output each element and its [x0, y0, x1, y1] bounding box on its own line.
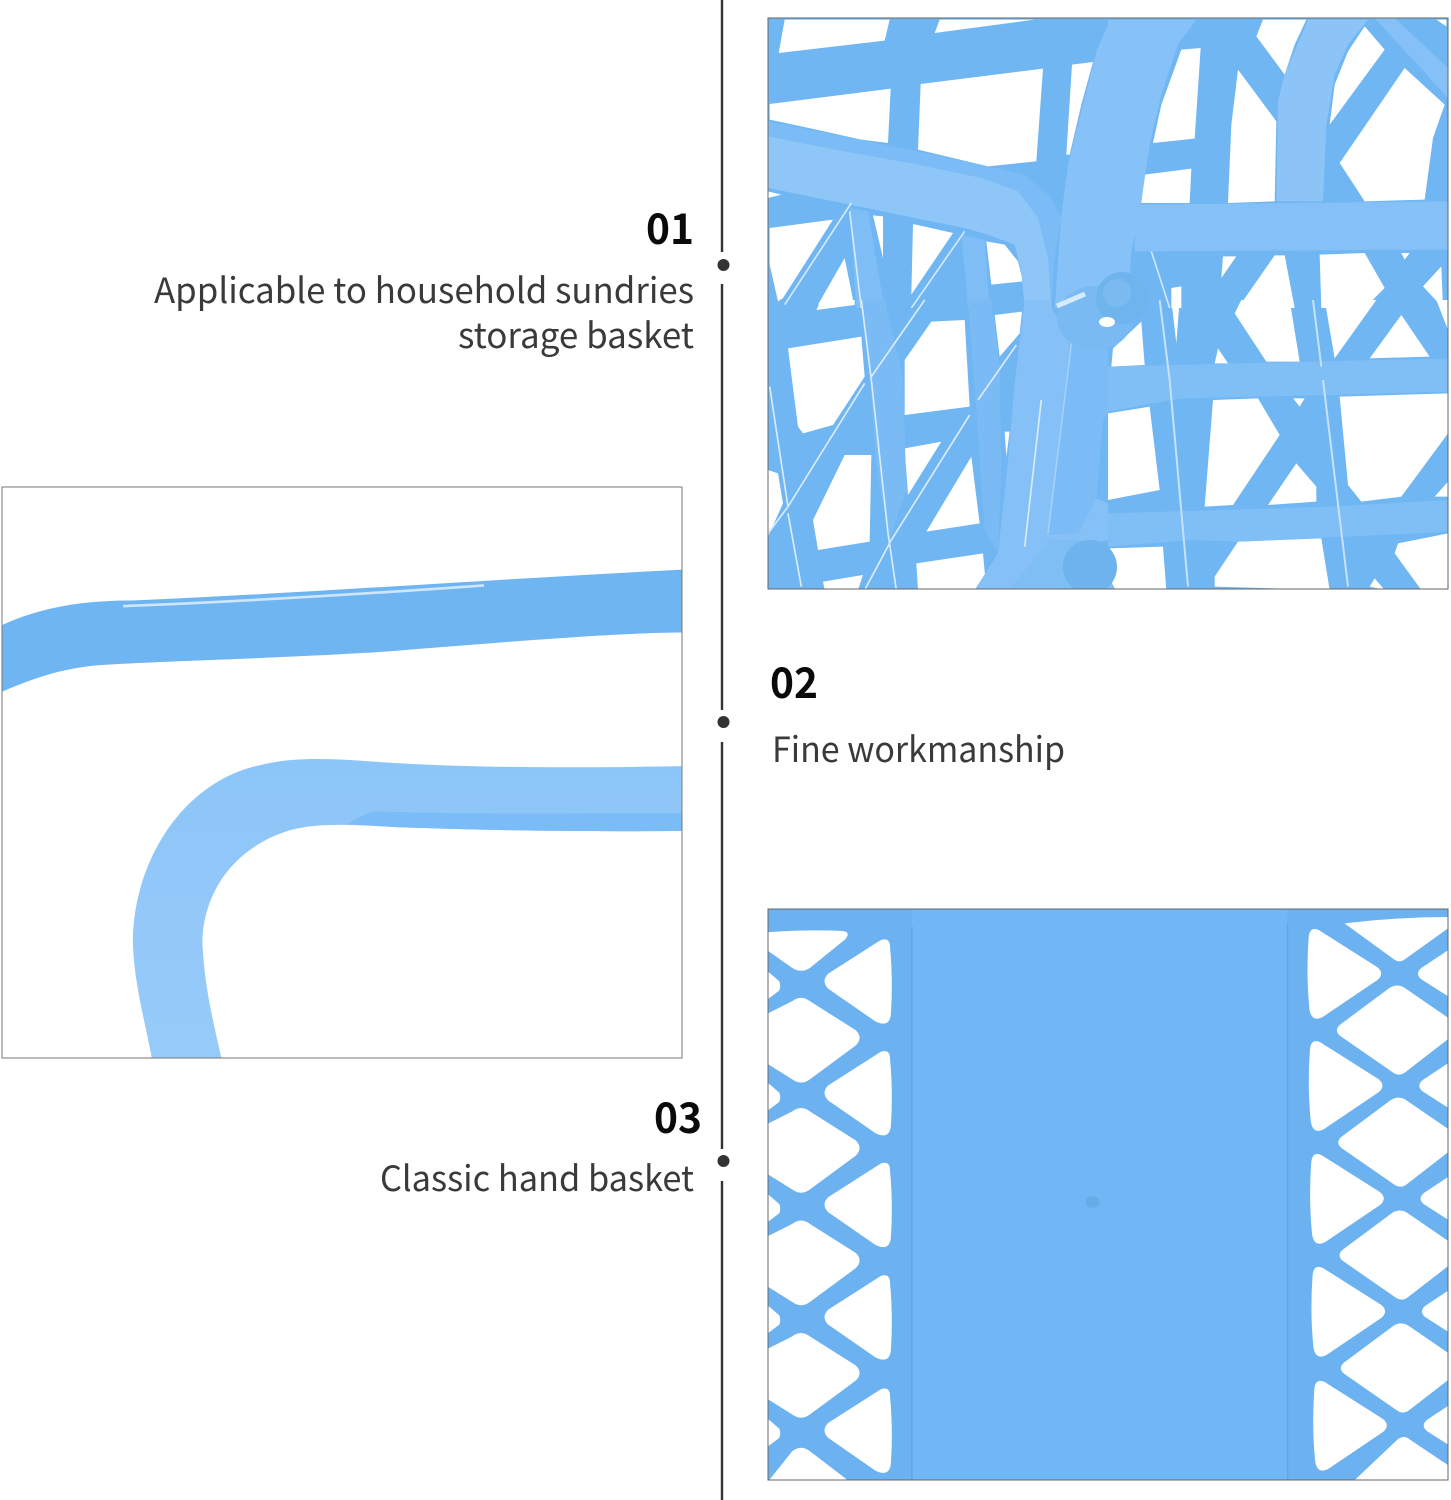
struts under the handle [850, 208, 990, 308]
feature 03 text: 03 [654, 1085, 702, 1146]
panel: flat side and diamond lattice [766, 909, 1451, 1481]
lower cross bars [1108, 358, 1448, 547]
feature 03 text [380, 1085, 702, 1202]
top-left quadrant of the lattice [768, 20, 1108, 308]
diamond and triangle openings [768, 917, 1451, 1481]
struts [861, 300, 1001, 553]
feature 02 text: Fine workmanship [772, 722, 1065, 773]
timeline: vertical line with three dots [718, 0, 730, 1500]
handle and arch lower section [975, 300, 1108, 590]
bottom-right quadrant of the lattice [1108, 300, 1448, 590]
feature 01 text: Applicable to household sundries [154, 263, 694, 314]
panel: smooth handle close-up [2, 487, 683, 1058]
upper cross bar [1135, 201, 1448, 251]
bottom-left quadrant of the lattice [768, 300, 1108, 590]
handle top bar [2, 570, 683, 692]
feature 01 text: storage basket [458, 308, 694, 359]
feature 01 text: 01 [646, 196, 694, 257]
side strips [766, 909, 1451, 1481]
feature 01 text [154, 196, 694, 359]
top-right quadrant of the lattice [1108, 18, 1448, 308]
handle lower bend [133, 759, 683, 1058]
panel: basket handle and lattice close-up [768, 18, 1448, 594]
icon: lower rivet of the handle [1062, 540, 1117, 588]
main arch segment [1108, 20, 1196, 276]
highlights on struts [768, 300, 1041, 590]
main arch segment [1055, 25, 1108, 308]
feature 02 text [770, 650, 1065, 773]
feature 03 text: Classic hand basket [380, 1151, 694, 1202]
icon: upper rivet of the handle [1056, 272, 1132, 348]
handle crossing the lattice [768, 121, 1061, 308]
panel seams [912, 923, 1288, 1479]
feature 02 text: 02 [770, 650, 818, 711]
second arch [1276, 20, 1368, 201]
